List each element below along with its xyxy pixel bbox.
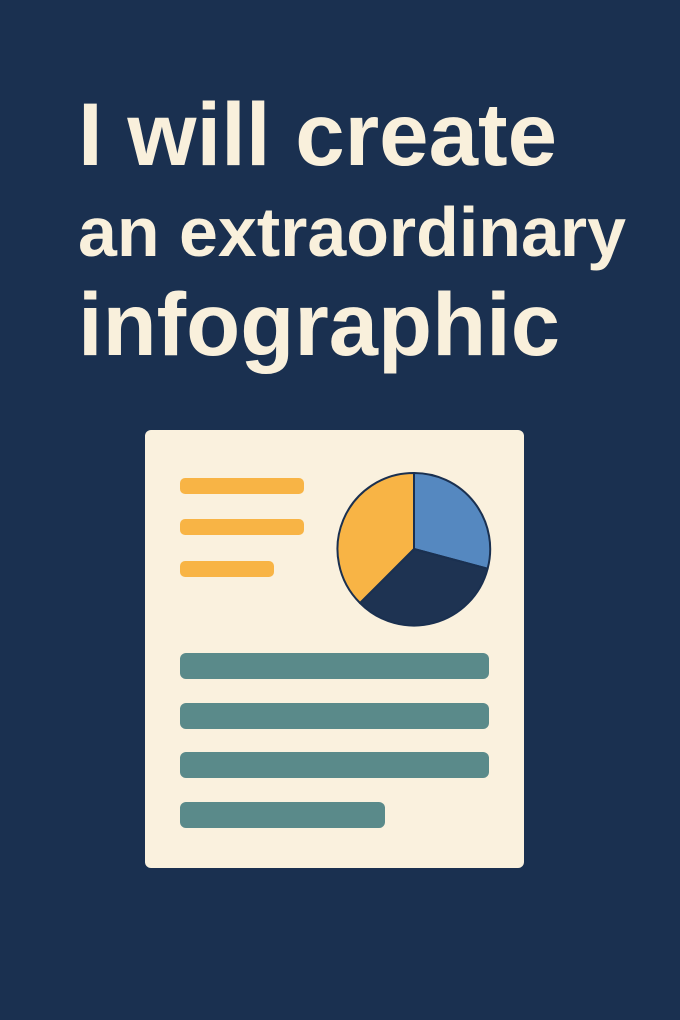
teal text lines bbox=[180, 653, 489, 828]
title bbox=[78, 84, 626, 374]
title: an extraordinary bbox=[78, 193, 626, 271]
panel: document card bbox=[145, 430, 524, 868]
title: infographic bbox=[78, 274, 560, 374]
title: I will create bbox=[78, 84, 557, 184]
orange text lines bbox=[180, 478, 304, 577]
pie chart bbox=[337, 473, 490, 626]
